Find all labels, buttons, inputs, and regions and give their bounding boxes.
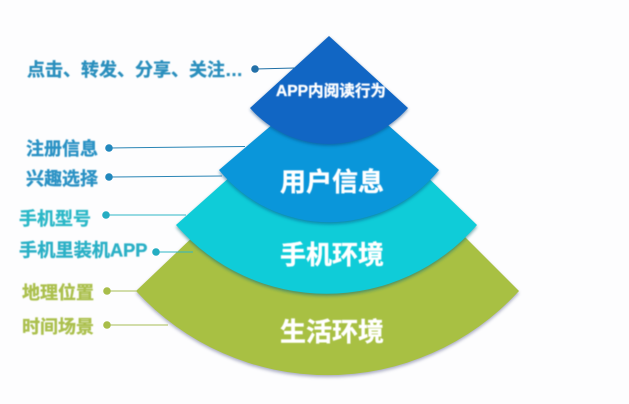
label: 生活环境: [280, 317, 384, 347]
callout: 手机型号: [19, 209, 186, 229]
callout: 地理位置: [22, 282, 137, 303]
callout: 时间场景: [22, 317, 168, 337]
layer: APP内阅读行为: [250, 36, 408, 145]
layer: 生活环境: [136, 232, 519, 377]
callout: 时间场景: 时间场景: [22, 317, 94, 337]
callout: 手机里装机APP: 手机里装机APP: [19, 240, 147, 260]
label: 手机环境: [280, 240, 384, 270]
label: APP内阅读行为: [276, 82, 386, 100]
connector: 手机里装机APP: [152, 248, 193, 256]
callout: 兴趣选择: [26, 169, 222, 189]
callout: 注册信息: [26, 138, 245, 159]
layer: 手机环境: [176, 168, 477, 296]
callout: 地理位置: 地理位置: [22, 282, 94, 303]
label: 用户信息: [280, 167, 384, 197]
layer: 用户信息: [219, 118, 439, 224]
callout: 手机型号: 手机型号: [19, 209, 91, 229]
callout: 注册信息: 注册信息: [26, 138, 98, 159]
callout: 点击、转发、分享、关注…: 点击、转发、分享、关注…: [27, 59, 243, 80]
callout: 兴趣选择: 兴趣选择: [26, 169, 98, 189]
